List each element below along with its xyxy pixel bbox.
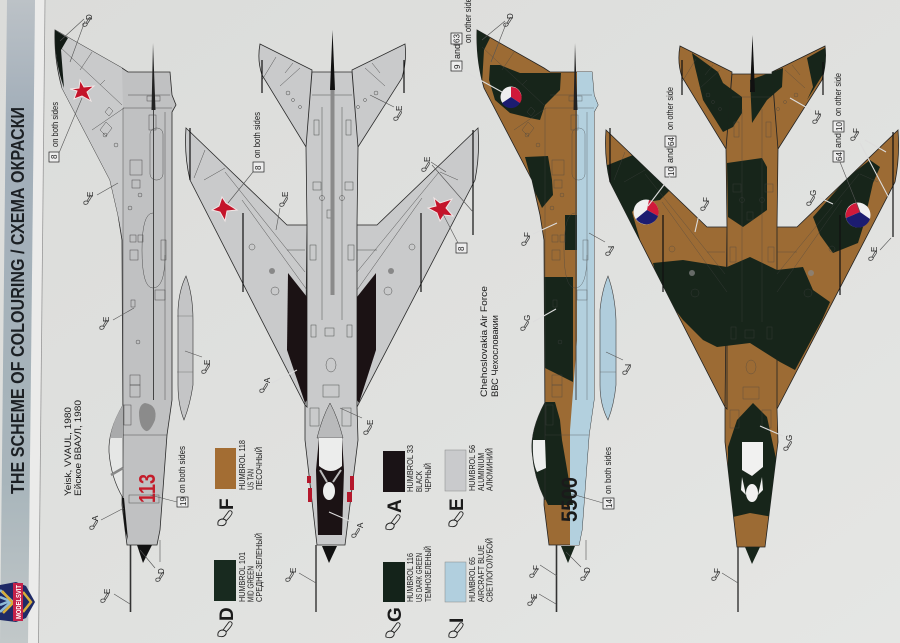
colour key: I: AIRCRAFT BLUE	[476, 545, 486, 602]
pitot	[130, 545, 132, 612]
paint callouts aircraft 2: A	[263, 377, 272, 383]
ventral fin	[322, 546, 337, 563]
decal callouts aircraft 4: 64	[667, 137, 676, 146]
paint callouts aircraft 4: G	[785, 435, 794, 441]
decal callouts aircraft 1: on both sides	[50, 102, 60, 147]
paint callouts aircraft 3: F	[532, 565, 541, 570]
paint callouts aircraft 2: E	[281, 192, 290, 197]
roundel right	[846, 202, 870, 228]
paint callouts aircraft 1: E	[103, 589, 112, 594]
paint callouts aircraft 4	[695, 98, 891, 583]
colour key: A: HUMBROL 33	[405, 445, 415, 492]
logo: Modelsvit	[0, 582, 35, 622]
decal callouts aircraft 3	[451, 0, 614, 509]
roundel	[500, 86, 522, 108]
decal callouts aircraft 4: on other side	[665, 87, 675, 130]
wing fences	[190, 60, 473, 292]
colour key: E: АЛЮМИНИЙ	[484, 448, 494, 491]
colour key: D: D	[217, 607, 238, 621]
colour key: I: I	[447, 618, 468, 623]
paint callouts aircraft 3: G	[523, 315, 532, 321]
paint callouts aircraft 3: I	[624, 364, 633, 366]
ventral fin	[745, 547, 760, 564]
drop tank	[178, 276, 193, 420]
colour key: A	[383, 445, 433, 530]
caption: Yeisk	[63, 400, 83, 496]
decal callouts aircraft 3: 14	[605, 499, 614, 508]
colour key: I: СВЕТЛОГОЛУБОЙ	[484, 538, 494, 602]
drop tank	[600, 276, 616, 420]
fences	[610, 60, 893, 295]
decal callouts aircraft 3: 9	[453, 64, 462, 69]
colour key: D: MID GREEN	[246, 566, 256, 602]
tail tip black	[55, 30, 68, 88]
cockpit	[316, 438, 344, 535]
decal callouts aircraft 1: on both sides	[177, 446, 187, 493]
colour key: F: US TAN	[246, 469, 256, 490]
decal callouts aircraft 3: on both sides	[603, 447, 613, 494]
paint callouts aircraft 4: F	[713, 568, 722, 573]
paint callouts aircraft 1: A	[91, 515, 100, 521]
colour key: A: BLACK	[414, 471, 424, 492]
pitot	[315, 545, 317, 612]
ventral fin	[137, 545, 152, 563]
aircraft 3: camouflage side view	[470, 25, 616, 612]
decal callouts aircraft 4: and	[833, 133, 843, 148]
paint callouts aircraft 4: F	[702, 197, 711, 202]
colour key: G: HUMBROL 116	[405, 553, 415, 602]
colour key: E	[445, 445, 494, 527]
colour key: A: ЧЕРНЫЙ	[422, 463, 433, 492]
paint callouts aircraft 4: F	[852, 128, 861, 133]
colour key: I	[445, 538, 494, 638]
camo patches	[692, 53, 742, 132]
paint callouts aircraft 1	[60, 14, 212, 604]
star	[70, 80, 94, 101]
wing black panels	[287, 273, 307, 403]
colour key: D: HUMBROL 101	[237, 552, 247, 602]
blue underside	[570, 72, 598, 545]
decal callouts aircraft 3: 63	[452, 34, 462, 43]
canopy	[532, 402, 545, 500]
fin spike	[574, 43, 578, 110]
paint callouts aircraft 1: D	[85, 14, 94, 20]
paint callouts aircraft 1: E	[102, 317, 111, 322]
paint callouts aircraft 2: E	[366, 420, 375, 425]
colour key: F: F	[217, 498, 238, 510]
fin spike	[330, 30, 335, 90]
pitot	[737, 547, 739, 612]
paint callouts aircraft 3: E	[530, 594, 539, 599]
paint callouts aircraft 1: D	[157, 568, 166, 574]
paint callouts aircraft 2: A	[356, 522, 365, 528]
decal callouts aircraft 4: and	[665, 148, 675, 163]
pitot	[556, 545, 558, 612]
camo patches	[477, 30, 490, 80]
title banner	[0, 0, 35, 643]
intake cone blob	[139, 403, 156, 431]
colour key: D	[214, 533, 264, 637]
paint callouts aircraft 3: D	[583, 567, 592, 573]
caption: Yeisk: Yeisk, VVAUL, 1980	[63, 407, 73, 496]
paint callouts aircraft 2: E	[423, 157, 432, 162]
decal callouts aircraft 4: on other side	[833, 73, 843, 116]
aircraft 1: grey side view	[55, 30, 193, 612]
caption: Czechoslovakia: ВВС Чехословакии	[490, 315, 500, 397]
decal callouts aircraft 4: 10	[667, 167, 676, 176]
colour key: G: US DARK GREEN	[414, 553, 424, 602]
aircraft 2: grey top view	[186, 30, 479, 612]
bort number 113	[129, 474, 160, 503]
colour key: F: HUMBROL 118	[237, 440, 247, 490]
colour key: E: ALUMINIUM	[476, 453, 486, 491]
red number on intake	[307, 476, 354, 502]
decal callouts aircraft 2: 8	[457, 246, 466, 251]
paint callouts aircraft 4: G	[809, 190, 818, 196]
decal callouts aircraft 4: 10	[835, 122, 844, 131]
decal callouts aircraft 2: 8	[254, 165, 263, 170]
caption: Yeisk: Ейское ВВАУЛ, 1980	[73, 400, 83, 496]
decal callouts aircraft 1	[49, 98, 188, 507]
star right	[428, 198, 453, 221]
roundel left	[634, 200, 659, 224]
decal callouts aircraft 4: 64	[835, 152, 844, 161]
caption: Czechoslovakia: Chehoslovakia Air Force	[479, 286, 489, 397]
colour key: G	[383, 546, 433, 638]
colour key: A: A	[385, 499, 406, 513]
fin spike	[750, 35, 755, 92]
paint callouts aircraft 4: E	[870, 247, 879, 252]
ventral fin	[561, 546, 575, 563]
aircraft 4: camouflage top view	[600, 35, 899, 612]
paint callouts aircraft 2	[260, 95, 473, 583]
paint callouts aircraft 3: D	[506, 13, 515, 19]
paint callouts aircraft 3	[482, 13, 633, 605]
cockpit	[742, 442, 763, 476]
decal callouts aircraft 1: 8	[50, 154, 59, 159]
paint callouts aircraft 2: E	[395, 106, 404, 111]
colour key: F: ПЕСОЧНЫЙ	[253, 447, 264, 490]
bort number: 5500	[557, 477, 582, 522]
caption: Czechoslovakia	[479, 286, 500, 397]
canopy	[109, 405, 123, 498]
paint callouts aircraft 1: E	[86, 192, 95, 197]
fin spike	[152, 43, 156, 110]
paint callouts aircraft 3: F	[523, 232, 532, 237]
paint callouts aircraft 4: F	[814, 110, 823, 115]
decal callouts aircraft 3: and	[452, 44, 462, 59]
colour key: E: E	[447, 498, 468, 511]
anti-glare black	[122, 498, 128, 540]
logo: Modelsvit: MODELSVIT	[14, 585, 23, 619]
decal callouts aircraft 4	[648, 73, 860, 212]
paint callouts aircraft 3: I	[607, 246, 616, 248]
paint callouts aircraft 1: E	[203, 360, 212, 365]
star left	[212, 197, 237, 221]
decal callouts aircraft 1: 19	[179, 497, 188, 506]
paint callouts aircraft 2: E	[289, 568, 298, 573]
colour key: D: СРЕДНЕ-ЗЕЛЕНЫЙ	[253, 533, 264, 602]
colour key: E: HUMBROL 56	[467, 445, 477, 491]
colour key: G: ТЕМНОЗЕЛЕНЫЙ	[422, 546, 433, 602]
left margin band	[28, 0, 45, 643]
title banner: THE SCHEME OF COLOURING / СХЕМА ОКРАСКИ	[7, 107, 28, 494]
decal callouts aircraft 2: on both sides	[252, 112, 262, 158]
colour key: G: G	[385, 607, 406, 622]
decal callouts aircraft 2	[228, 112, 467, 253]
colour key: I: HUMBROL 65	[467, 557, 477, 602]
colour key: F	[215, 440, 264, 526]
bort number 113: 113	[134, 474, 160, 503]
